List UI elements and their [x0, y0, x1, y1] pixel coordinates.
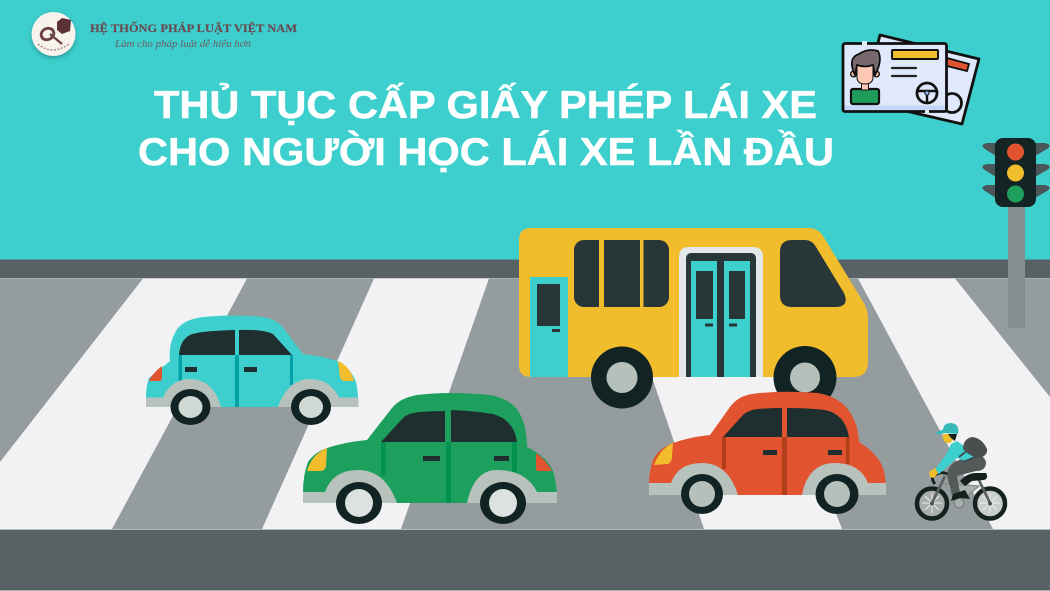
title: CHO NGƯỜI HỌC LÁI XE LẦN ĐẦU [138, 130, 834, 174]
cyclist [917, 423, 1005, 518]
tagline: Làm cho pháp luật dễ hiểu hơn [114, 39, 251, 50]
green car wheels [336, 482, 526, 524]
rider [929, 423, 987, 501]
bus wheels [591, 346, 836, 409]
road with crosswalk [0, 260, 1050, 591]
red car [649, 392, 886, 514]
bicycle [917, 473, 1005, 518]
brand name: HỆ THỐNG PHÁP LUẬT VIỆT NAM [90, 20, 297, 35]
bus side windows [574, 240, 669, 307]
bus windscreen [780, 240, 846, 307]
teal car [146, 316, 358, 425]
bus [519, 228, 868, 409]
green car [303, 393, 557, 524]
logo [32, 12, 76, 56]
red car wheels [681, 474, 858, 514]
teal car wheels [170, 389, 331, 425]
bus rear door [530, 277, 568, 377]
icon: driving licence cards [843, 35, 979, 124]
title [138, 83, 834, 174]
title: THỦ TỤC CẤP GIẤY PHÉP LÁI XE [154, 83, 817, 127]
bus front door [679, 247, 763, 377]
traffic light [982, 138, 1050, 328]
